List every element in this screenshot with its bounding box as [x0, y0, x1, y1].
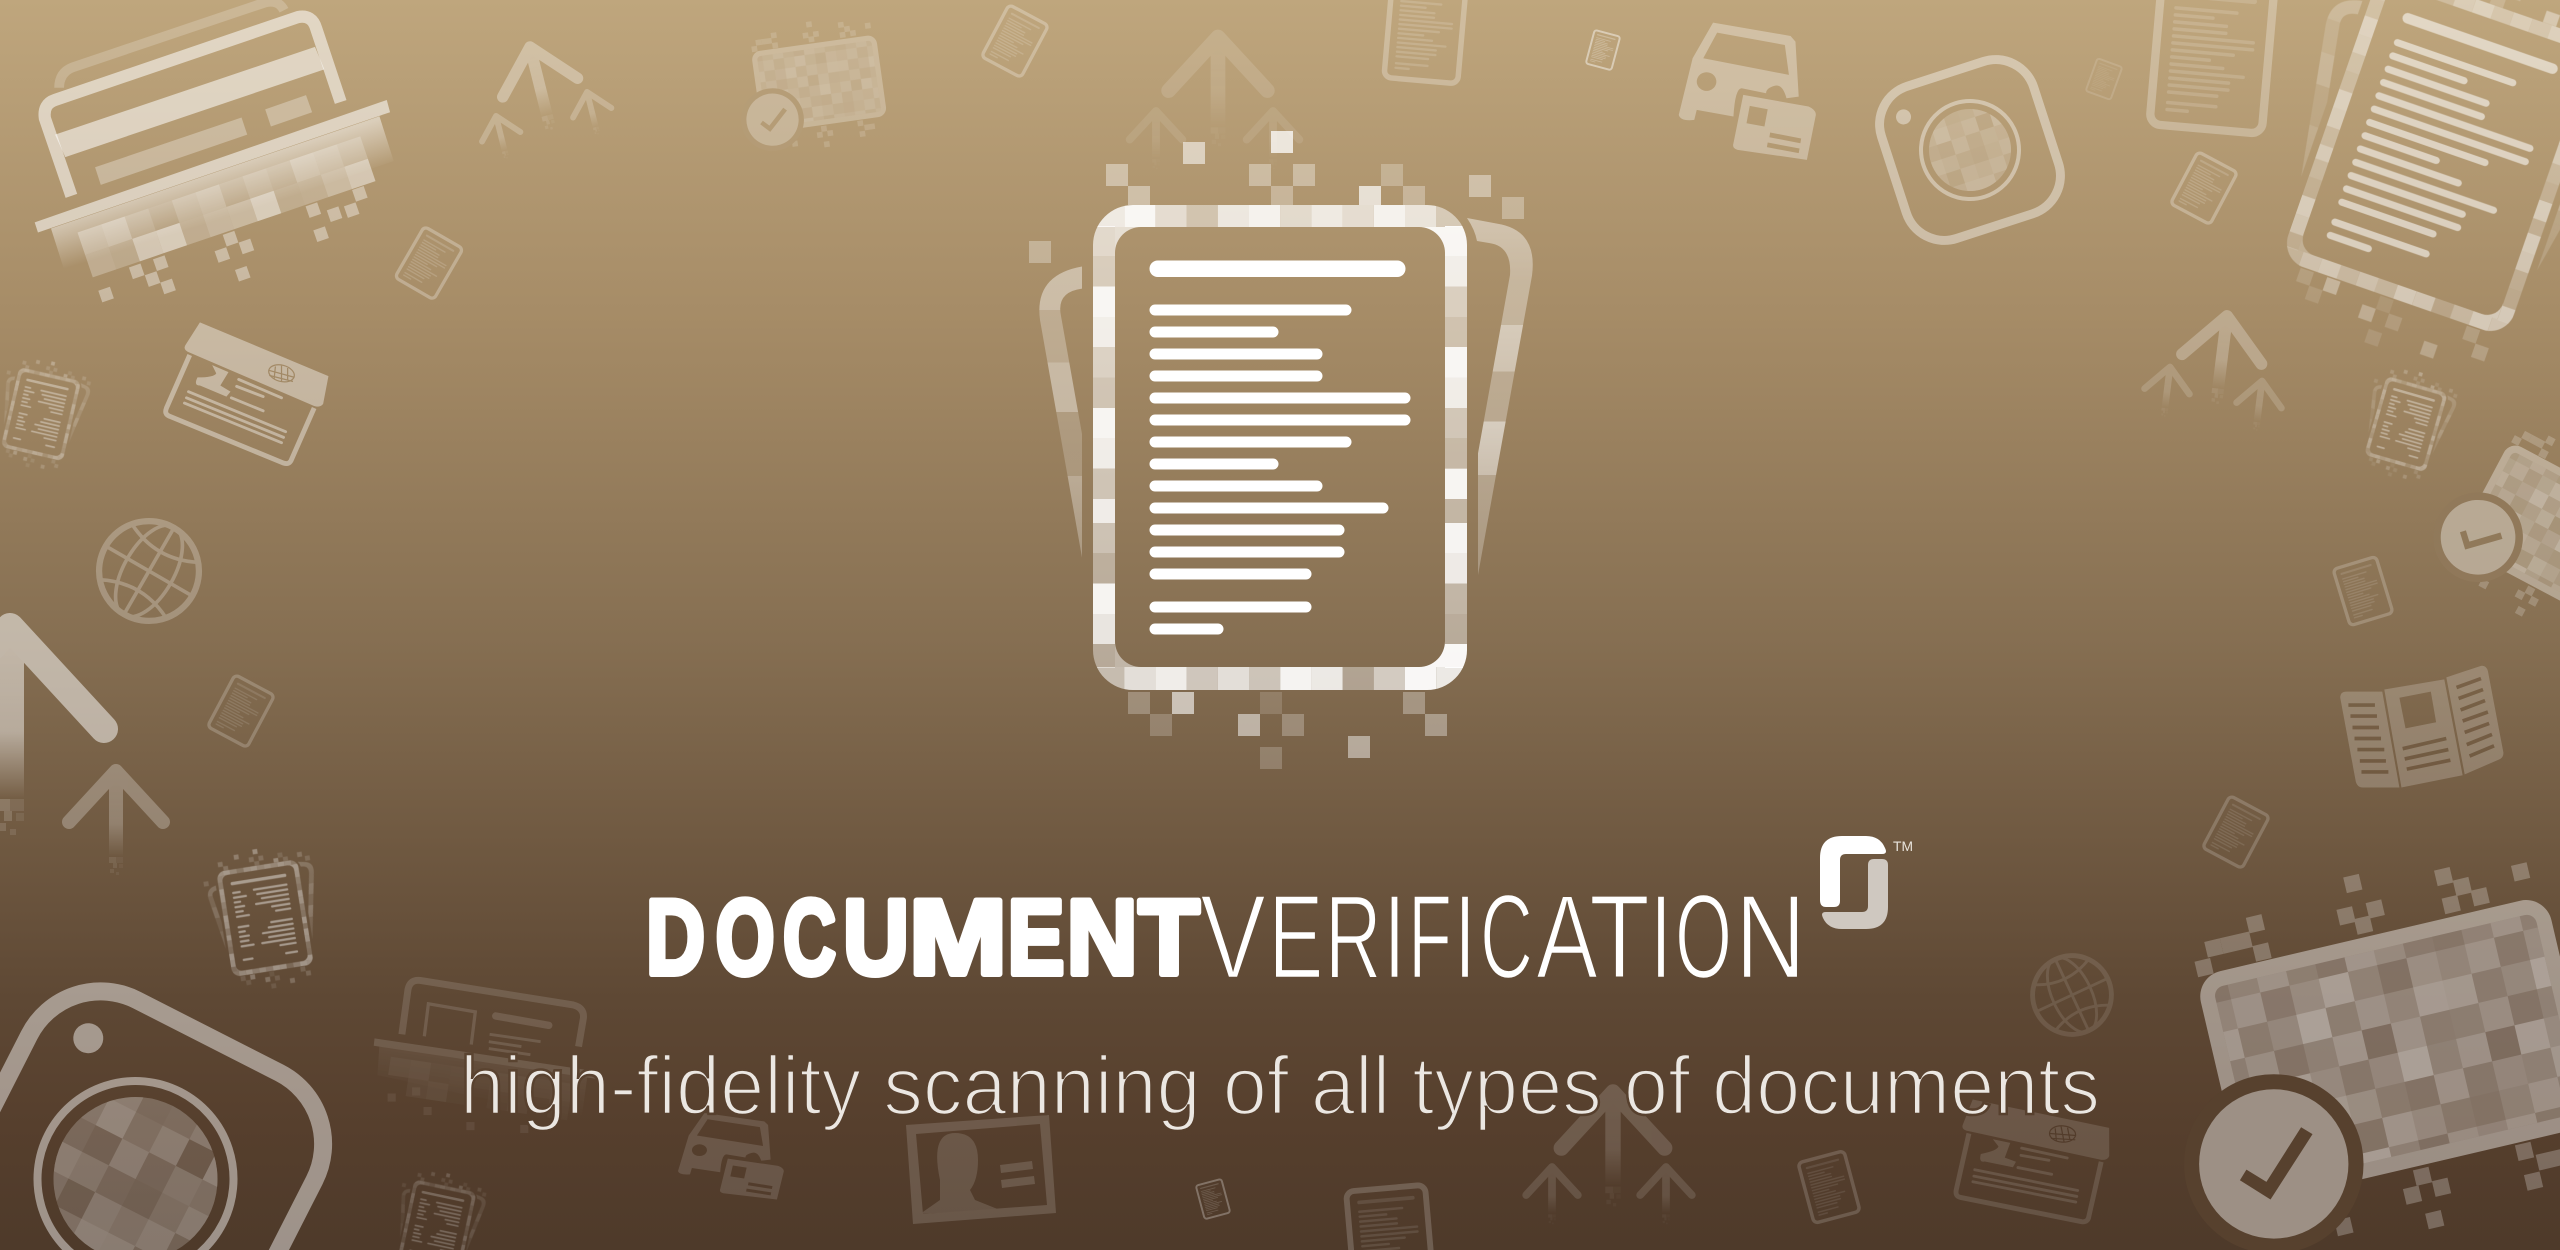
title: T — [1138, 877, 1200, 997]
title: U — [843, 877, 909, 997]
icon: car and license top — [1679, 23, 1816, 160]
icon: document bottom center — [1346, 1185, 1434, 1250]
icon: arrows top center — [1130, 37, 1299, 169]
icon: arrows top right — [2142, 311, 2284, 433]
icon: document top center — [1384, 0, 1466, 84]
icon: tiny document bottom — [1196, 1179, 1230, 1219]
title: F — [1408, 870, 1452, 1004]
title: V — [1200, 870, 1266, 1004]
icon: open passport — [2340, 666, 2503, 787]
icon: car and license bottom — [678, 1113, 784, 1200]
icon: document top right — [2149, 0, 2275, 134]
title — [646, 870, 1806, 1004]
icon: globe left — [80, 502, 218, 640]
title: I — [1384, 870, 1406, 1004]
title: T — [1589, 870, 1650, 1004]
icon: scanner top-left — [35, 2, 394, 302]
icon: stacked document right — [2350, 361, 2462, 488]
title: I — [1650, 870, 1672, 1004]
logo mark — [1820, 836, 1888, 929]
icon: mosaic card with check, right edge — [2405, 396, 2560, 661]
icon: large arrow left edge — [0, 627, 104, 835]
trademark: TM — [1893, 838, 1913, 854]
icon: small document left lower — [207, 675, 275, 748]
title: N — [1735, 870, 1806, 1004]
icon: small document right — [2333, 556, 2393, 626]
title: O — [716, 877, 775, 997]
icon: faint scanner with photo, bottom left — [374, 980, 600, 1133]
icon: small document under top right document — [2170, 152, 2238, 225]
title: M — [909, 877, 1007, 997]
icon: arrows top-left — [477, 38, 617, 163]
icon: small document tilted, left — [395, 226, 463, 300]
icon: stacked document upper left — [0, 352, 95, 477]
main document icon — [1029, 131, 1533, 769]
icon: stacked document bottom left — [384, 1165, 490, 1250]
title: I — [1454, 870, 1476, 1004]
icon: stacked document left — [200, 841, 331, 997]
icon: photo ID bottom — [906, 1115, 1056, 1224]
icon: mosaic card with check, top — [722, 13, 891, 162]
icon: tiny document top — [1586, 30, 1620, 70]
icon: faint ID card bottom right — [1939, 1075, 2126, 1245]
icon: tiny document top right — [2086, 58, 2122, 100]
title: C — [783, 877, 836, 997]
title: O — [1675, 870, 1732, 1004]
title: R — [1325, 870, 1382, 1004]
title: N — [1067, 877, 1138, 997]
icon: arrows bottom center — [1526, 1092, 1692, 1224]
title: E — [1008, 877, 1064, 997]
icon: camera bottom left — [0, 964, 351, 1250]
icon: ID card with band — [166, 322, 328, 464]
icon: small document bottom right of center — [1798, 1151, 1860, 1223]
title: E — [1268, 870, 1323, 1004]
subtitle: high-fidelity scanning of all types of documents — [460, 1039, 2100, 1132]
title: A — [1536, 870, 1598, 1004]
icon: small document right lower — [2202, 796, 2270, 869]
icon: large document top right — [2225, 0, 2560, 400]
icon: globe bottom right — [2019, 942, 2125, 1048]
icon: small document top, left of center — [981, 5, 1049, 78]
title: D — [646, 877, 705, 997]
icon: large mosaic card with check, bottom right — [2109, 833, 2560, 1250]
title: C — [1480, 870, 1533, 1004]
icon: camera top right — [1869, 49, 2071, 251]
icon: arrow left — [69, 771, 163, 875]
